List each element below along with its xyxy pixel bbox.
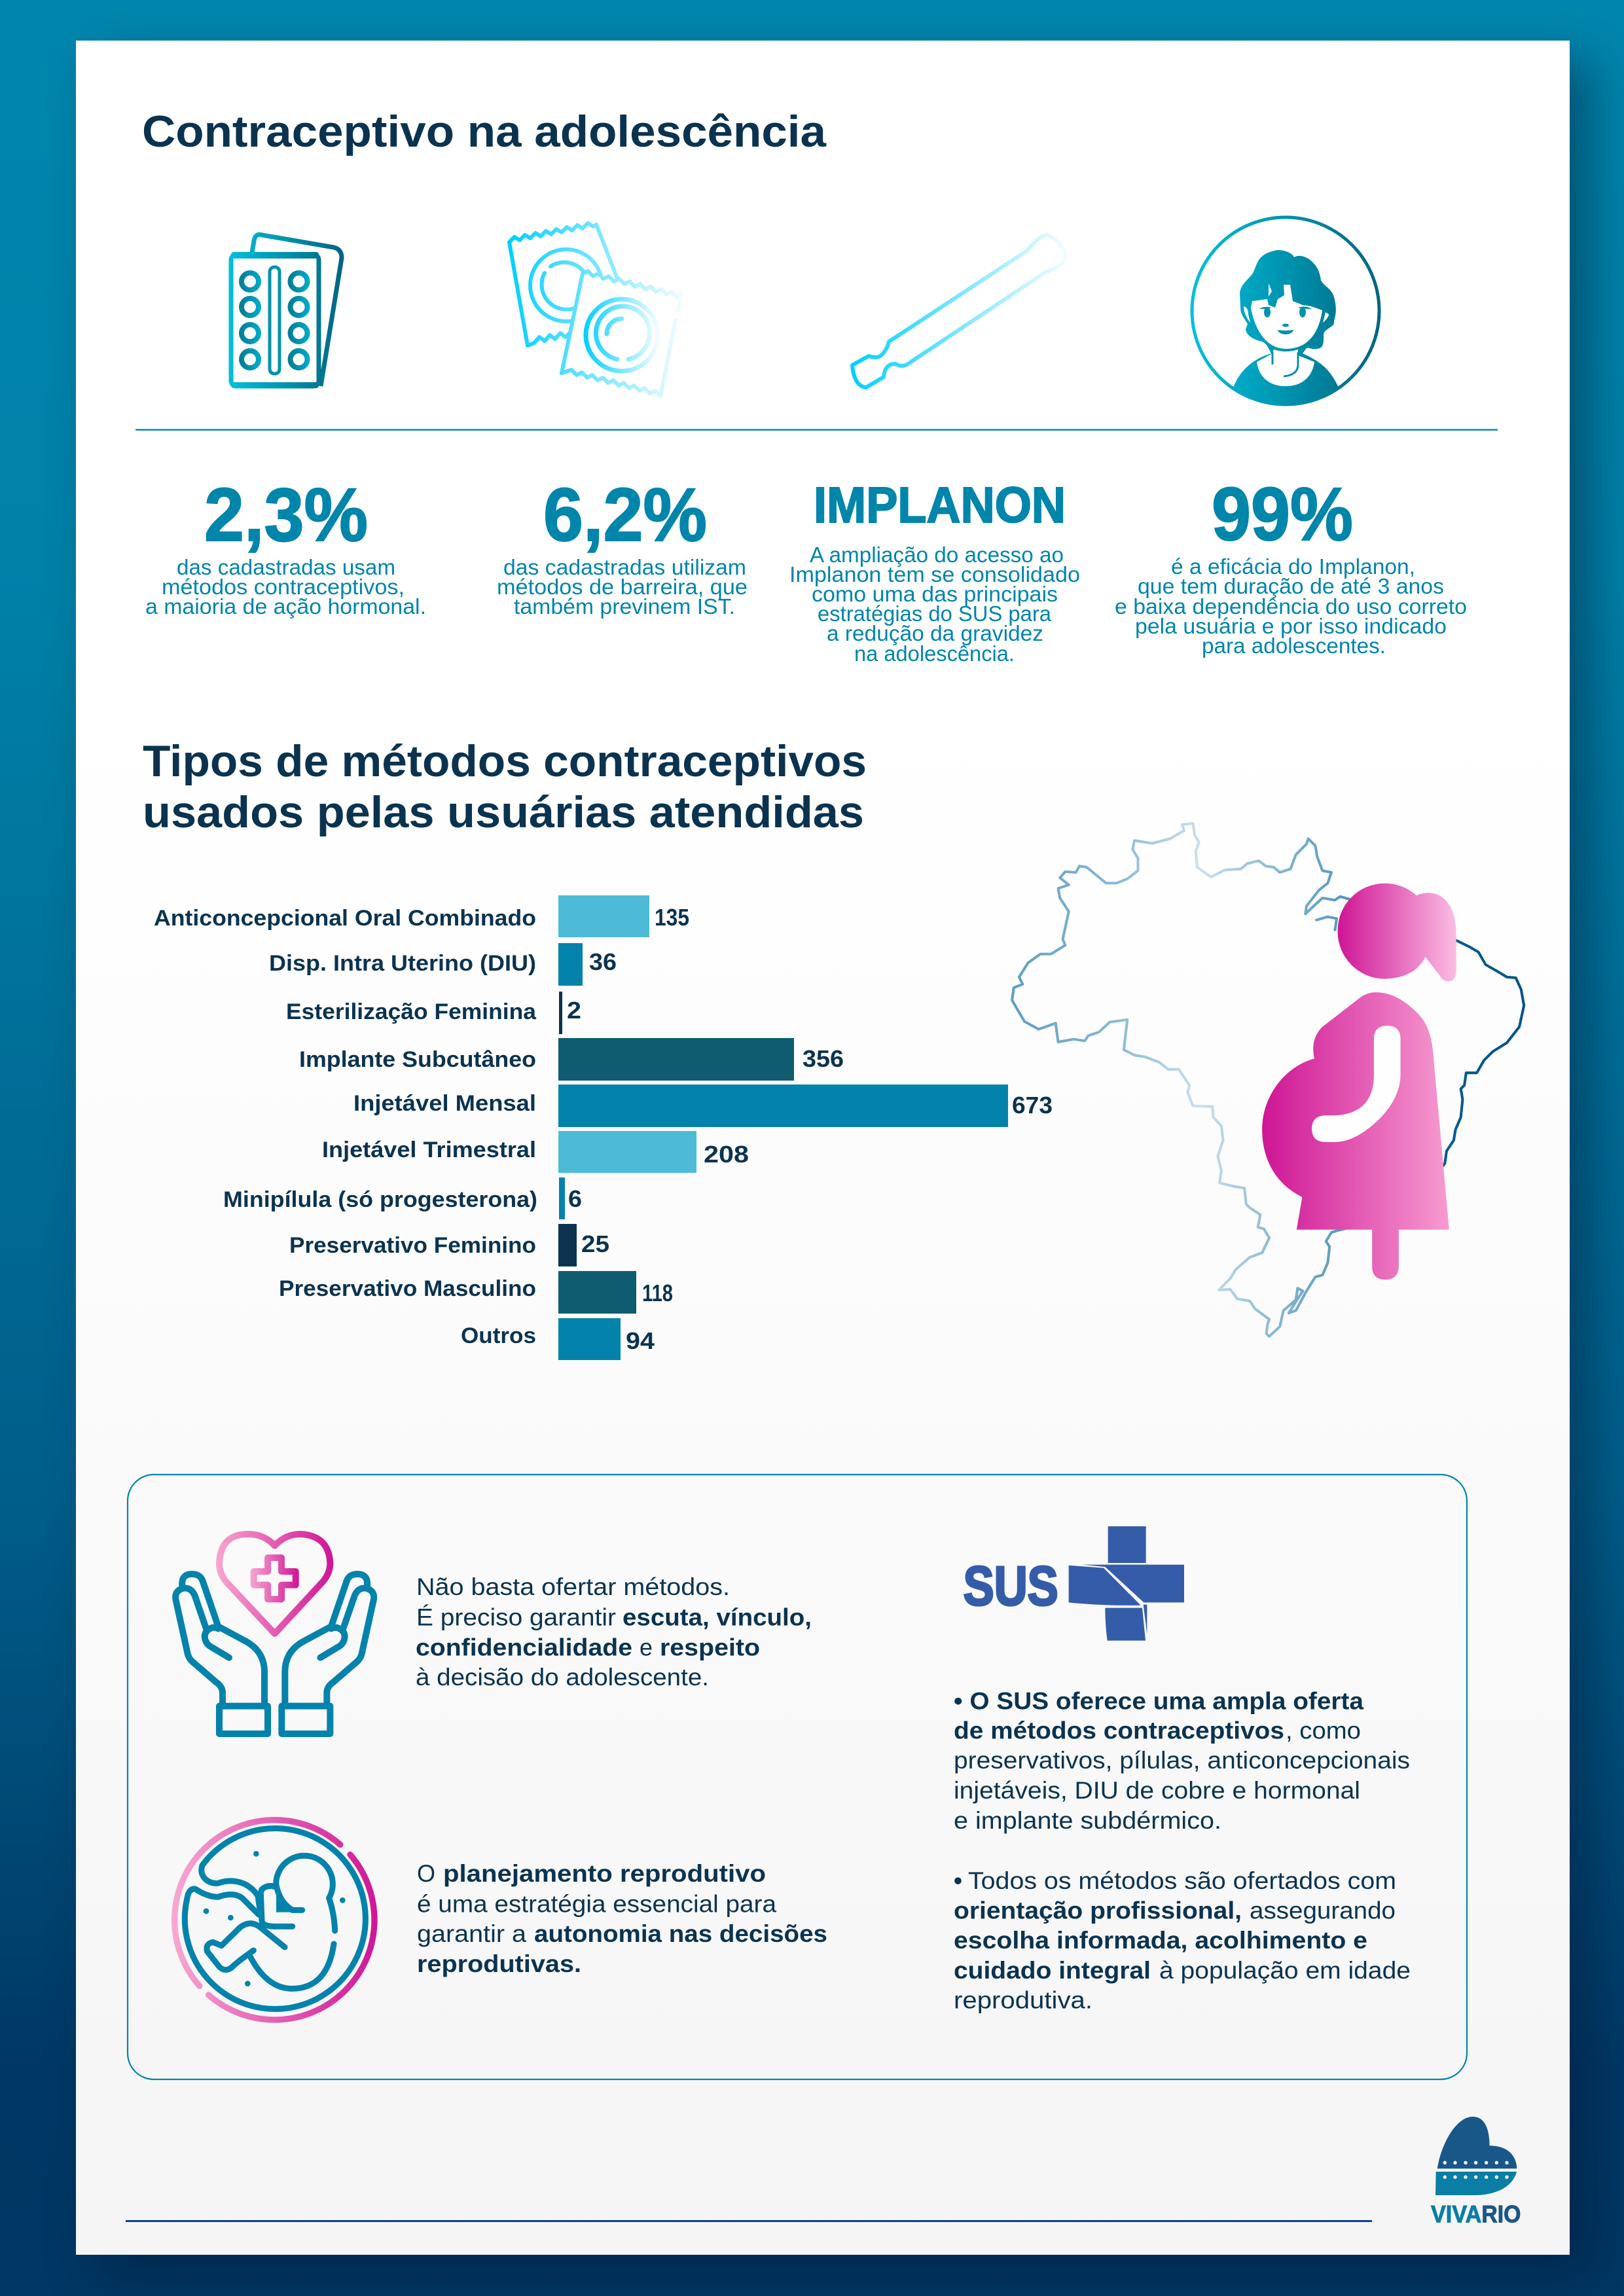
text: SUS oferta (954, 1687, 1410, 1834)
bar chart: methods used: 673 (1012, 1092, 1053, 1119)
stat: 99%: que tem duração de até 3 anos (1138, 574, 1444, 598)
stat: 99%: pela usuária e por isso indicado (1135, 614, 1447, 638)
stat: 6,2%: métodos de barreira, que (497, 575, 748, 599)
heading: tipos de métodos: Tipos de métodos contraceptivos (143, 736, 867, 786)
bar chart: methods used: Esterilização Feminina (286, 999, 537, 1024)
bar chart: methods used (154, 895, 1053, 1360)
text: planejamento reprodutivo: garantir a (417, 1920, 526, 1947)
bar chart: methods used: Injetável Mensal (353, 1091, 536, 1116)
stat: 99%: para adolescentes. (1202, 634, 1386, 658)
logo: Vivario (1431, 2117, 1521, 2227)
stat: IMPLANON: Implanon tem se consolidado (789, 562, 1080, 586)
text: escuta e vínculo: Não basta ofertar métodos. (416, 1573, 730, 1600)
icon: condom packets (509, 223, 681, 396)
icon: hands holding heart (175, 1534, 374, 1734)
text: orientação profissional: orientação profissional, (954, 1897, 1242, 1924)
icon: adolescent woman portrait (1192, 217, 1379, 419)
stat: IMPLANON: estratégias do SUS para (818, 601, 1052, 626)
text: SUS oferta: , como (1286, 1717, 1361, 1744)
stat: IMPLANON: na adolescência. (854, 641, 1015, 666)
stat: IMPLANON: como uma das principais (812, 582, 1058, 606)
text: SUS oferta: de métodos contraceptivos (954, 1717, 1284, 1744)
heading: tipos de métodos (143, 736, 867, 837)
stat: 2,3%: das cadastradas usam (177, 555, 395, 579)
bar chart: methods used: 2 (567, 997, 581, 1024)
text: planejamento reprodutivo: autonomia nas decisões (534, 1920, 827, 1947)
text: orientação profissional: Todos os métodos são ofertados com (968, 1867, 1396, 1894)
text: orientação profissional: cuidado integral (954, 1957, 1151, 1984)
bar chart: methods used: Anticoncepcional Oral Combinado (154, 906, 536, 931)
title: Contraceptivo na adolescência (142, 107, 827, 156)
text: orientação profissional: escolha informada, acolhimento e (954, 1927, 1367, 1954)
text: SUS oferta: injetáveis, DIU de cobre e hormonal (954, 1777, 1360, 1804)
text: escuta e vínculo (416, 1573, 812, 1691)
bar chart: methods used: Minipílula (só progesterona) (223, 1187, 537, 1212)
stat: 2,3%: 2,3% (204, 473, 368, 557)
stat: 2,3% (145, 473, 426, 619)
text: planejamento reprodutivo (417, 1860, 827, 1977)
bar chart: methods used: Implante Subcutâneo (299, 1047, 536, 1072)
logo: Vivario: RIO (1481, 2200, 1521, 2227)
bar chart: methods used: Injetável Trimestral (322, 1138, 536, 1162)
text: orientação profissional: • (954, 1867, 962, 1894)
text: escuta e vínculo: É preciso garantir (416, 1604, 616, 1631)
bar chart: methods used: 356 (803, 1045, 844, 1072)
text: escuta e vínculo: escuta, vínculo, (623, 1604, 812, 1631)
stat: IMPLANON: A ampliação do acesso ao (810, 543, 1064, 567)
stat: 99%: é a eficácia do Implanon, (1171, 554, 1415, 579)
icon: pregnant woman (1262, 884, 1456, 1280)
map outline (1012, 823, 1524, 1336)
stat: 99%: 99% (1212, 473, 1353, 556)
stat: IMPLANON (789, 477, 1080, 666)
text: orientação profissional: assegurando (1250, 1897, 1396, 1924)
stat: 6,2%: também previnem IST. (514, 594, 735, 619)
stat: 99% (1115, 473, 1467, 658)
logo: Vivario: VIVA (1431, 2200, 1481, 2227)
icon: contraceptive implant (852, 235, 1066, 387)
stat: 99%: e baixa dependência do uso correto (1115, 594, 1467, 619)
text: planejamento reprodutivo: é uma estratégia essencial para (417, 1890, 776, 1918)
footer line (126, 2220, 1372, 2222)
bar chart: methods used: 36 (589, 948, 617, 975)
stat: 6,2%: 6,2% (543, 473, 707, 557)
stat: 2,3%: a maioria de ação hormonal. (145, 594, 426, 619)
icon: contraceptive pill blister (231, 234, 342, 388)
bar chart: methods used: Disp. Intra Uterino (DIU) (269, 951, 536, 976)
stat: IMPLANON: a redução da gravidez (827, 621, 1043, 645)
bar chart: methods used: Preservativo Feminino (289, 1233, 536, 1258)
bar chart: methods used: 118 (642, 1280, 673, 1306)
stat: 2,3%: métodos contraceptivos, (162, 575, 405, 599)
text: SUS oferta: • O SUS oferece uma ampla oferta (954, 1687, 1363, 1715)
text: orientação profissional: à população em idade (1159, 1957, 1411, 1984)
icon: fetus in womb (175, 1820, 374, 2020)
panel: information box (128, 1475, 1467, 2079)
bar chart: methods used: 94 (626, 1327, 655, 1354)
text: SUS oferta: preservativos, pílulas, anticoncepcionais (954, 1747, 1410, 1774)
stat: 6,2% (497, 473, 748, 619)
text: planejamento reprodutivo: O (417, 1860, 435, 1887)
text: orientação profissional (954, 1867, 1411, 2013)
text: planejamento reprodutivo: planejamento reprodutivo (443, 1860, 766, 1887)
divider line (135, 429, 1498, 431)
bar chart: methods used: 135 (655, 904, 689, 931)
text: escuta e vínculo: e (640, 1634, 653, 1661)
heading: tipos de métodos: usados pelas usuárias atendidas (143, 787, 864, 837)
bar chart: methods used: 208 (704, 1141, 749, 1168)
bar chart: methods used: Outros (461, 1323, 536, 1348)
icon: SUS logo (964, 1526, 1184, 1641)
bar chart: methods used: 6 (568, 1185, 582, 1212)
text: escuta e vínculo: respeito (660, 1634, 760, 1661)
text: escuta e vínculo: à decisão do adolescente. (416, 1664, 709, 1691)
text: escuta e vínculo: confidencialidade (416, 1634, 632, 1661)
icon: SUS logo: SUS (964, 1555, 1058, 1617)
text: SUS oferta: e implante subdérmico. (954, 1807, 1221, 1834)
stat: 6,2%: das cadastradas utilizam (503, 555, 746, 579)
bar chart: methods used: 25 (581, 1230, 609, 1257)
text: planejamento reprodutivo: reprodutivas. (417, 1950, 581, 1977)
stat: IMPLANON: IMPLANON (814, 477, 1066, 533)
map of Brazil with pregnant woman (1012, 823, 1524, 1336)
text: orientação profissional: reprodutiva. (954, 1987, 1092, 2013)
bar chart: methods used: Preservativo Masculino (279, 1276, 536, 1301)
